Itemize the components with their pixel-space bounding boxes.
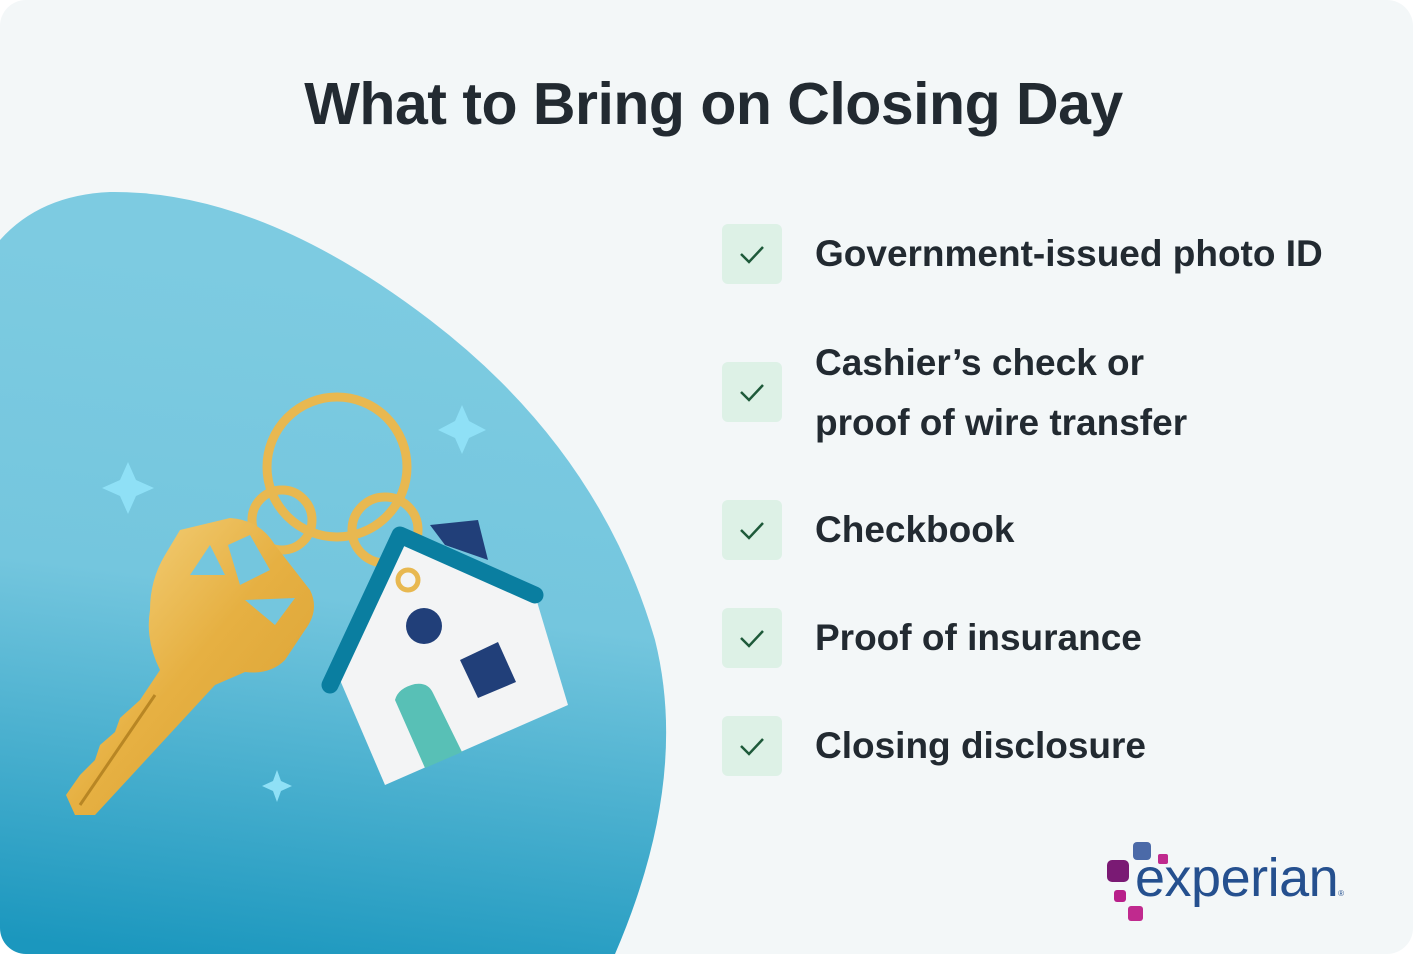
checklist item 5 xyxy=(722,716,1146,776)
icon: key ring xyxy=(252,397,418,563)
logo: experian xyxy=(1107,842,1344,921)
icon: sparkles xyxy=(102,405,486,802)
checklist item 4 xyxy=(722,608,1142,668)
checklist item 3 xyxy=(722,500,1014,560)
title: What to Bring on Closing Day xyxy=(304,71,1123,137)
checklist item 1: Government-issued photo ID xyxy=(815,233,1323,274)
icon: key xyxy=(66,518,314,815)
checklist item 2: proof of wire transfer xyxy=(815,402,1187,443)
checklist item 2: Cashier’s check or xyxy=(815,342,1144,383)
checklist item 2 xyxy=(722,342,1187,443)
checklist item 5: Closing disclosure xyxy=(815,725,1146,766)
logo: experian: experian® xyxy=(1135,848,1344,908)
icon: house keychain xyxy=(330,520,568,785)
blob background xyxy=(0,192,666,954)
checklist item 3: Checkbook xyxy=(815,509,1014,550)
checklist item 1 xyxy=(722,224,1323,284)
checklist item 4: Proof of insurance xyxy=(815,617,1142,658)
